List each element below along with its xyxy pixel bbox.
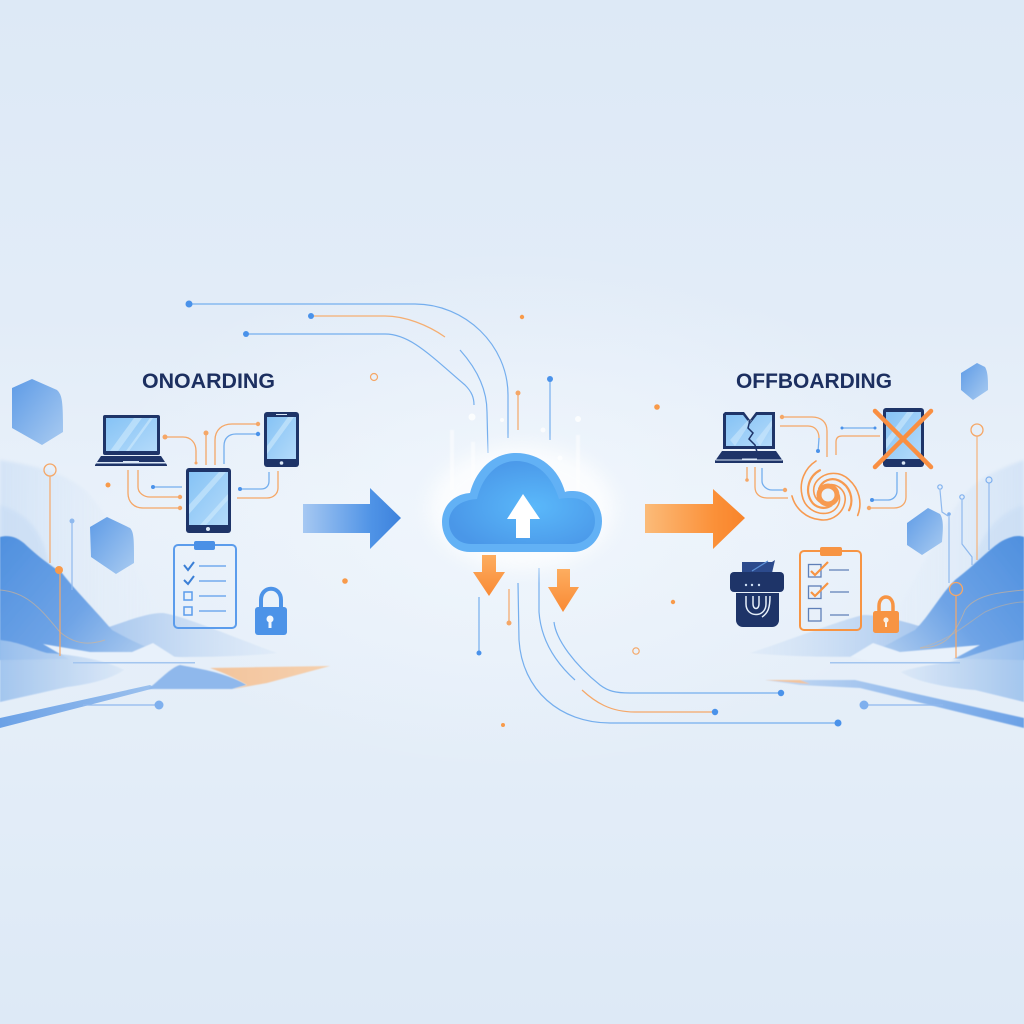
icon: cracked laptop <box>715 412 783 463</box>
hexagon: mid right <box>907 508 943 555</box>
icon: onboarding checklist <box>174 541 236 628</box>
right landscape <box>750 460 1024 702</box>
icon: orange padlock <box>873 597 899 633</box>
left decorative pins <box>44 464 164 710</box>
icon: cloud with upload arrow <box>442 453 602 552</box>
icon: shredder <box>730 560 784 627</box>
arrow: orange down right <box>548 569 579 612</box>
offboarding connectors <box>745 415 906 510</box>
icon: blue padlock <box>255 589 287 635</box>
hexagon: top right <box>961 363 988 400</box>
hexagon: mid left <box>90 517 134 574</box>
small mountain <box>148 665 247 689</box>
icon: crossed out tablet <box>875 408 931 467</box>
heading: offboarding: OFFBOARDING <box>736 370 892 393</box>
right road <box>765 680 1024 728</box>
icon: offboarding checklist <box>800 547 861 630</box>
top data lines <box>186 300 675 727</box>
icon: spiral vortex <box>787 461 870 529</box>
icon: laptop <box>95 415 167 466</box>
arrow: orange down left <box>473 555 505 596</box>
cloud glow <box>430 414 614 570</box>
onboarding connectors <box>128 422 278 510</box>
right decorative pins <box>860 424 992 710</box>
icon: tablet <box>186 468 231 533</box>
left landscape <box>0 460 277 702</box>
heading: onboarding: ONOARDING <box>142 370 275 393</box>
left road <box>0 685 155 728</box>
arrow: blue <box>303 488 401 549</box>
peach ground <box>210 666 330 689</box>
hexagon: top left <box>12 379 63 445</box>
arrow: orange <box>645 489 745 549</box>
icon: phone <box>264 412 299 467</box>
bottom data lines <box>476 568 842 726</box>
